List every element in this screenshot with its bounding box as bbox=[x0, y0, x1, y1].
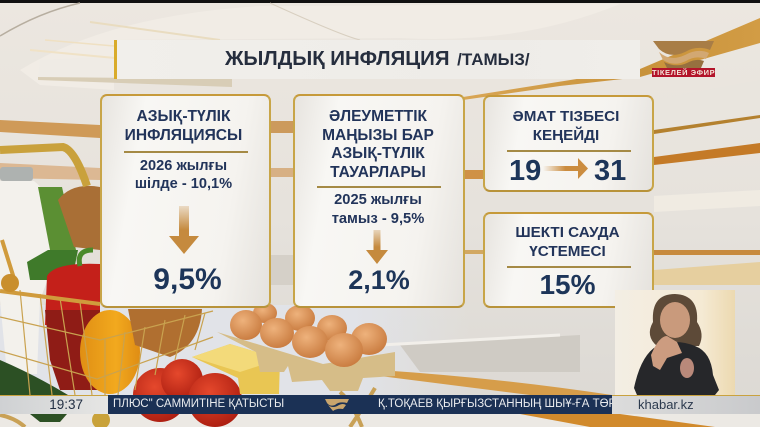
heading: retail chain expanded: КЕҢЕЙДІ bbox=[533, 127, 599, 144]
heading: socially significant food: МАҢЫЗЫ БАР bbox=[322, 126, 434, 144]
heading: retail chain expanded: ӘМАТ ТІЗБЕСІ bbox=[513, 108, 619, 125]
value: 15%: 15% bbox=[539, 269, 596, 300]
value: 19 to 31: 19 bbox=[509, 155, 541, 187]
heading: socially significant food: АЗЫҚ-ТҮЛІК bbox=[331, 145, 425, 162]
heading: trade margin limit: ҮСТЕМЕСІ bbox=[529, 243, 606, 260]
clock: 19:37 bbox=[49, 397, 83, 412]
heading: retail chain expanded bbox=[513, 108, 619, 144]
text: July 2026 value: 2026 жылғы bbox=[140, 158, 227, 174]
text: August 2025 value bbox=[332, 192, 424, 227]
arrow: right bbox=[544, 158, 588, 179]
panel: socially significant food bbox=[293, 94, 465, 308]
title text: ЖЫЛДЫҚ ИНФЛЯЦИЯ /ТАМЫЗ/ bbox=[225, 48, 530, 70]
panel: retail chain expanded bbox=[483, 95, 654, 192]
logo: channel emblem and live badge bbox=[652, 41, 715, 77]
panel: food inflation bbox=[100, 94, 271, 308]
sign language interpreter bbox=[615, 290, 735, 395]
news ticker: Қ.ТОҚАЕВ ҚЫРҒЫЗСТАННЫҢ ШЫҰ-ҒА ТӨР bbox=[378, 398, 612, 410]
live badge: ТІКЕЛЕЙ ЭФИР bbox=[652, 68, 715, 77]
value: 9,5%: 9,5% bbox=[153, 263, 222, 296]
text: July 2026 value bbox=[135, 158, 232, 192]
arrow: down bbox=[169, 206, 199, 254]
value: 19 to 31: 31 bbox=[594, 155, 626, 187]
value: 19 to 31 bbox=[509, 155, 626, 187]
value: 2,1%: 2,1% bbox=[348, 265, 410, 295]
heading: socially significant food bbox=[322, 108, 434, 180]
heading: socially significant food: ӘЛЕУМЕТТІК bbox=[329, 108, 427, 125]
icon: eggs in tray bbox=[217, 303, 395, 391]
ticker emblem bbox=[325, 399, 349, 411]
heading: food inflation: ИНФЛЯЦИЯСЫ bbox=[125, 127, 242, 144]
panel: trade margin limit bbox=[483, 212, 654, 308]
heading: socially significant food: ТАУАРЛАРЫ bbox=[330, 164, 426, 180]
heading: food inflation bbox=[125, 108, 242, 144]
news ticker bbox=[108, 395, 612, 414]
milk bottle bbox=[0, 167, 33, 181]
heading: trade margin limit bbox=[515, 224, 620, 260]
text: August 2025 value: 2025 жылғы bbox=[334, 192, 422, 208]
news ticker: ПЛЮС" САММИТІНЕ ҚАТЫСТЫ bbox=[113, 398, 284, 410]
heading: trade margin limit: ШЕКТІ САУДА bbox=[515, 224, 620, 241]
website: khabar.kz bbox=[638, 397, 694, 412]
arrow: down bbox=[366, 230, 388, 264]
title bar bbox=[114, 40, 640, 79]
text: July 2026 value: шілде - 10,1% bbox=[135, 176, 232, 192]
heading: food inflation: АЗЫҚ-ТҮЛІК bbox=[136, 108, 230, 125]
text: August 2025 value: тамыз - 9,5% bbox=[332, 211, 424, 227]
icon: food basket bbox=[0, 147, 280, 427]
ticker bar bbox=[0, 395, 760, 414]
clock bbox=[0, 395, 108, 414]
website bbox=[612, 395, 760, 414]
